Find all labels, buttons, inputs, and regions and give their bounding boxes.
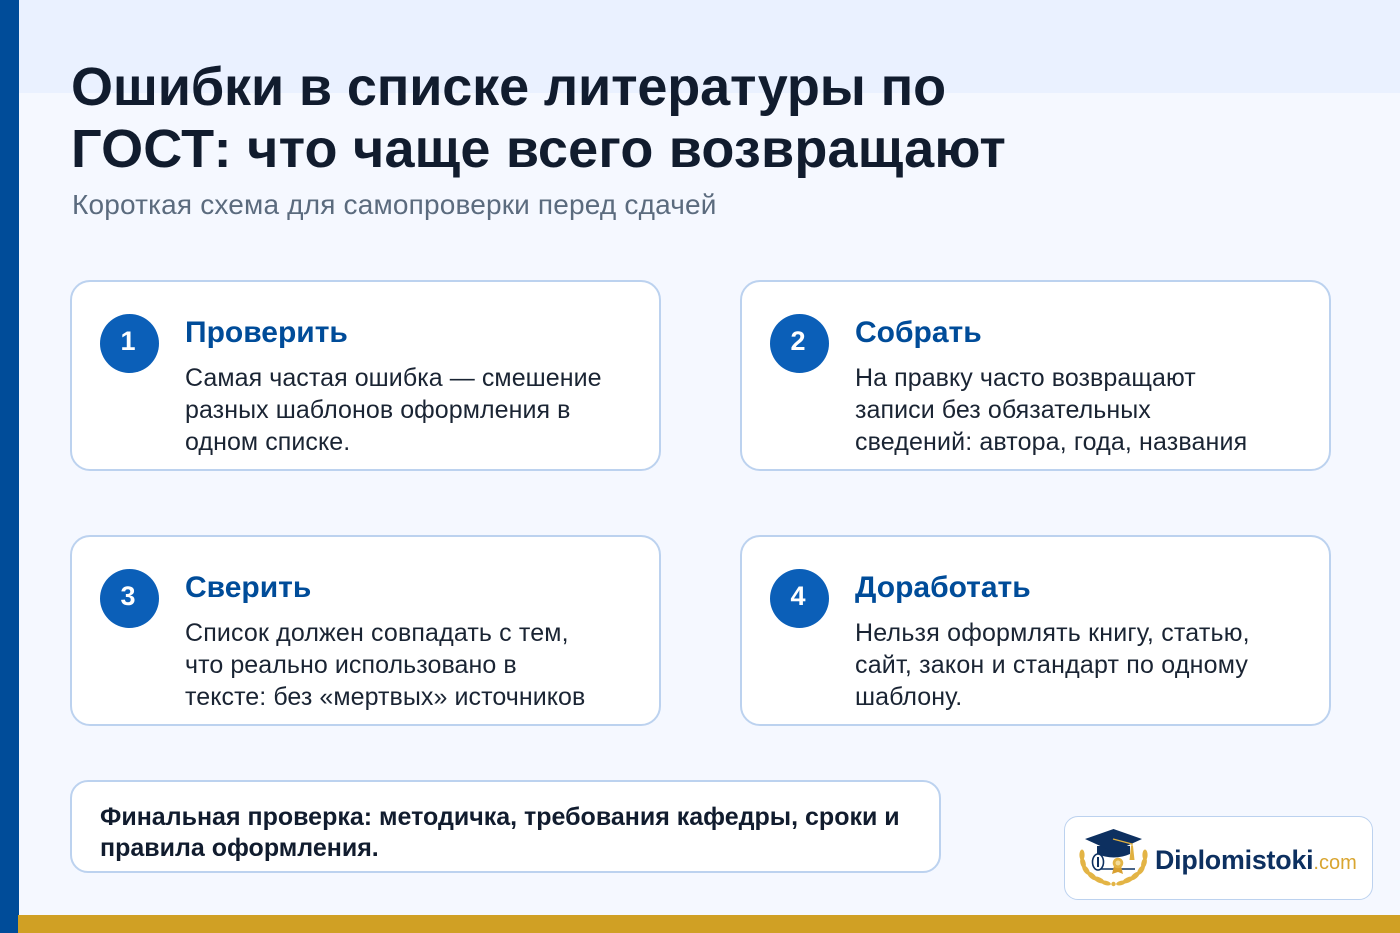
step 3 number: 3 [120, 581, 136, 611]
step 2 text [855, 364, 1247, 456]
step 1 text: одном списке. [185, 428, 350, 456]
step 2 heading: Собрать [855, 316, 982, 349]
final check text: Финальная проверка: методичка, требования кафедры, сроки и [100, 803, 900, 831]
step 2 text: На правку часто возвращают [855, 364, 1196, 392]
step 1 text: разных шаблонов оформления в [185, 396, 571, 424]
step 4 number: 4 [790, 581, 806, 611]
logo panel [1064, 816, 1373, 900]
step 4 text: сайт, закон и стандарт по одному [855, 651, 1248, 679]
step 2 number: 2 [790, 326, 806, 356]
step 4 heading: Доработать [855, 571, 1031, 604]
step 1 number: 1 [120, 326, 136, 356]
diploma scroll [1095, 855, 1133, 869]
step 4 number [770, 569, 829, 628]
icon: graduation cap with laurel [1079, 829, 1148, 886]
step 2 number [770, 314, 829, 373]
bottom accent bar [18, 915, 1400, 933]
header band [19, 0, 1400, 93]
step 3 text: Список должен совпадать с тем, [185, 619, 569, 647]
final check text [100, 803, 900, 862]
panel: final check [70, 780, 941, 873]
logo wordmark: Diplomistoki.com [1155, 845, 1357, 875]
final check text: правила оформления. [100, 834, 379, 862]
step 3 text: что реально использовано в [185, 651, 517, 679]
step 4 text: Нельзя оформлять книгу, статью, [855, 619, 1250, 647]
step 3 heading: Сверить [185, 571, 311, 604]
title: ГОСТ: что чаще всего возвращают [71, 119, 1006, 179]
step 1 text: Самая частая ошибка — смешение [185, 364, 602, 392]
subtitle: Короткая схема для самопроверки перед сдачей [72, 189, 717, 220]
left accent bar [0, 0, 19, 933]
step 2 text: сведений: автора, года, названия [855, 428, 1247, 456]
step 3 text [185, 619, 585, 711]
step 4 text [855, 619, 1250, 711]
step 3 number [100, 569, 159, 628]
step 1 heading: Проверить [185, 316, 348, 349]
step 1 text [185, 364, 602, 456]
step 3 text: тексте: без «мертвых» источников [185, 683, 585, 711]
panel: step 1 [70, 280, 661, 471]
step 1 number [100, 314, 159, 373]
title: Ошибки в списке литературы по [71, 57, 946, 117]
step 2 text: записи без обязательных [855, 396, 1151, 424]
panel: step 4 [740, 535, 1331, 726]
step 4 text: шаблону. [855, 683, 962, 711]
panel: step 2 [740, 280, 1331, 471]
title [71, 57, 1006, 179]
panel: step 3 [70, 535, 661, 726]
